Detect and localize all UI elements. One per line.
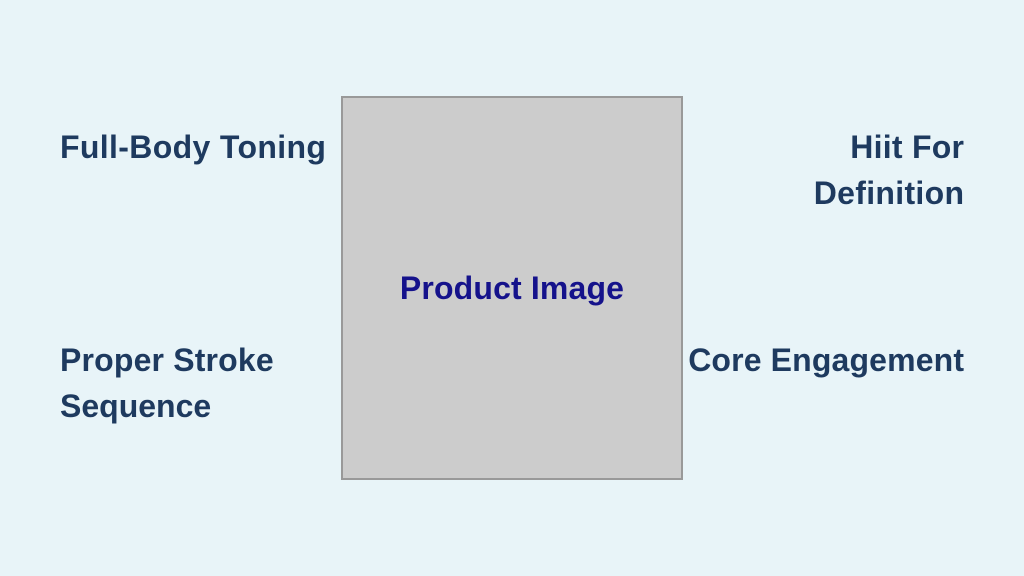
label: proper stroke sequence — [60, 342, 274, 424]
label: full-body toning: Full-Body Toning — [60, 129, 326, 165]
label: proper stroke sequence: Proper Stroke — [60, 342, 274, 378]
label: hiit for definition — [814, 129, 964, 211]
label: proper stroke sequence: Sequence — [60, 388, 211, 424]
product image text: Product Image — [400, 270, 624, 306]
label: core engagement: Core Engagement — [688, 342, 964, 378]
panel: product image placeholder — [341, 96, 683, 480]
label: hiit for definition: Definition — [814, 175, 964, 211]
label: hiit for definition: Hiit For — [850, 129, 964, 165]
